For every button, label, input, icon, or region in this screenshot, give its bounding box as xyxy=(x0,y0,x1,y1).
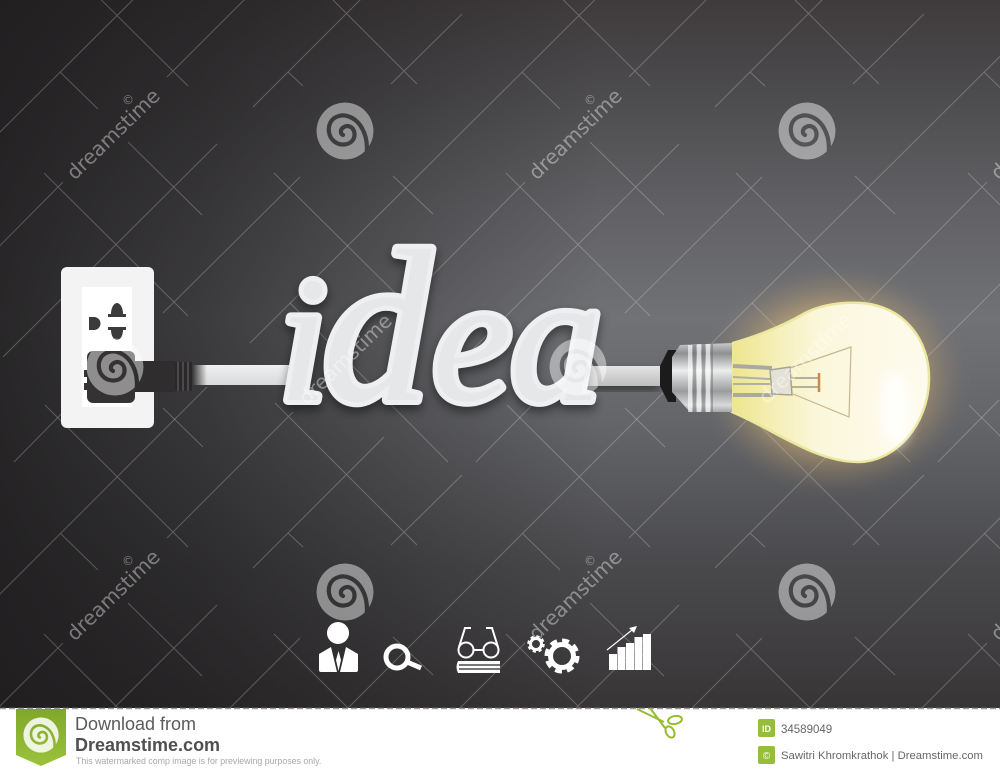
watermark: dreamstime text: dreamstime xyxy=(62,545,165,645)
bulb glass xyxy=(732,303,929,462)
panel: wall socket plate xyxy=(61,267,154,428)
socket inner face xyxy=(82,287,132,407)
watermark: dreamstime text: © xyxy=(122,93,134,107)
icon: scissors xyxy=(637,708,683,739)
title: idea lettering: d xyxy=(322,207,432,448)
icon: growth chart xyxy=(607,626,651,670)
watermark: spirals xyxy=(86,102,836,620)
icon: light bulb xyxy=(660,268,965,492)
watermark: dreamstime text: © xyxy=(584,93,596,107)
icon: power plug and cord xyxy=(84,351,192,403)
bulb metal base xyxy=(672,343,732,412)
icon: magnifier xyxy=(386,646,421,668)
watermark: dreamstime text: © xyxy=(584,554,596,568)
footer: download text: This watermarked comp image is for previewing purposes only. xyxy=(76,756,321,766)
title: idea lettering: e xyxy=(432,240,512,439)
footer: copyright credit xyxy=(758,746,983,764)
footer: copyright credit: Sawitri Khromkrathok | Dreamstime.com xyxy=(781,750,983,762)
icon: gears xyxy=(528,636,578,672)
watermark: dreamstime text: dreamstime xyxy=(524,545,627,645)
watermark: dreamstime text xyxy=(62,84,1000,645)
footer: download text: Dreamstime.com xyxy=(75,735,220,755)
bulb glow xyxy=(705,268,965,492)
title: idea lettering: i xyxy=(278,240,328,439)
footer: image id: 34589049 xyxy=(781,724,832,736)
footer panel xyxy=(0,708,1000,766)
icon: glasses on book xyxy=(456,628,500,673)
bulb filament xyxy=(733,347,851,417)
watermark: dreamstime text: dreamstime xyxy=(754,308,857,408)
footer: download text xyxy=(75,714,321,766)
footer: copyright credit: © xyxy=(763,751,771,762)
cable: left white cord xyxy=(192,365,296,385)
footer: image id: ID xyxy=(762,724,772,734)
icon: businessman xyxy=(319,622,358,672)
icon: green ribbon logo xyxy=(16,709,66,766)
bulb screw cap end xyxy=(660,350,676,402)
watermark: dreamstime text: dreamstime xyxy=(524,84,627,184)
watermark: dreamstime text: dreamstime xyxy=(62,84,165,184)
icon: socket holes xyxy=(89,303,126,340)
footer: download text: Download from xyxy=(75,714,196,734)
title: idea lettering: a xyxy=(510,236,602,441)
watermark: dreamstime text: © xyxy=(122,554,134,568)
cable: right white cord xyxy=(585,366,660,386)
watermark: dreamstime text: dreamstime xyxy=(294,309,397,409)
bulb highlight xyxy=(879,370,911,446)
footer: image id xyxy=(758,719,832,737)
